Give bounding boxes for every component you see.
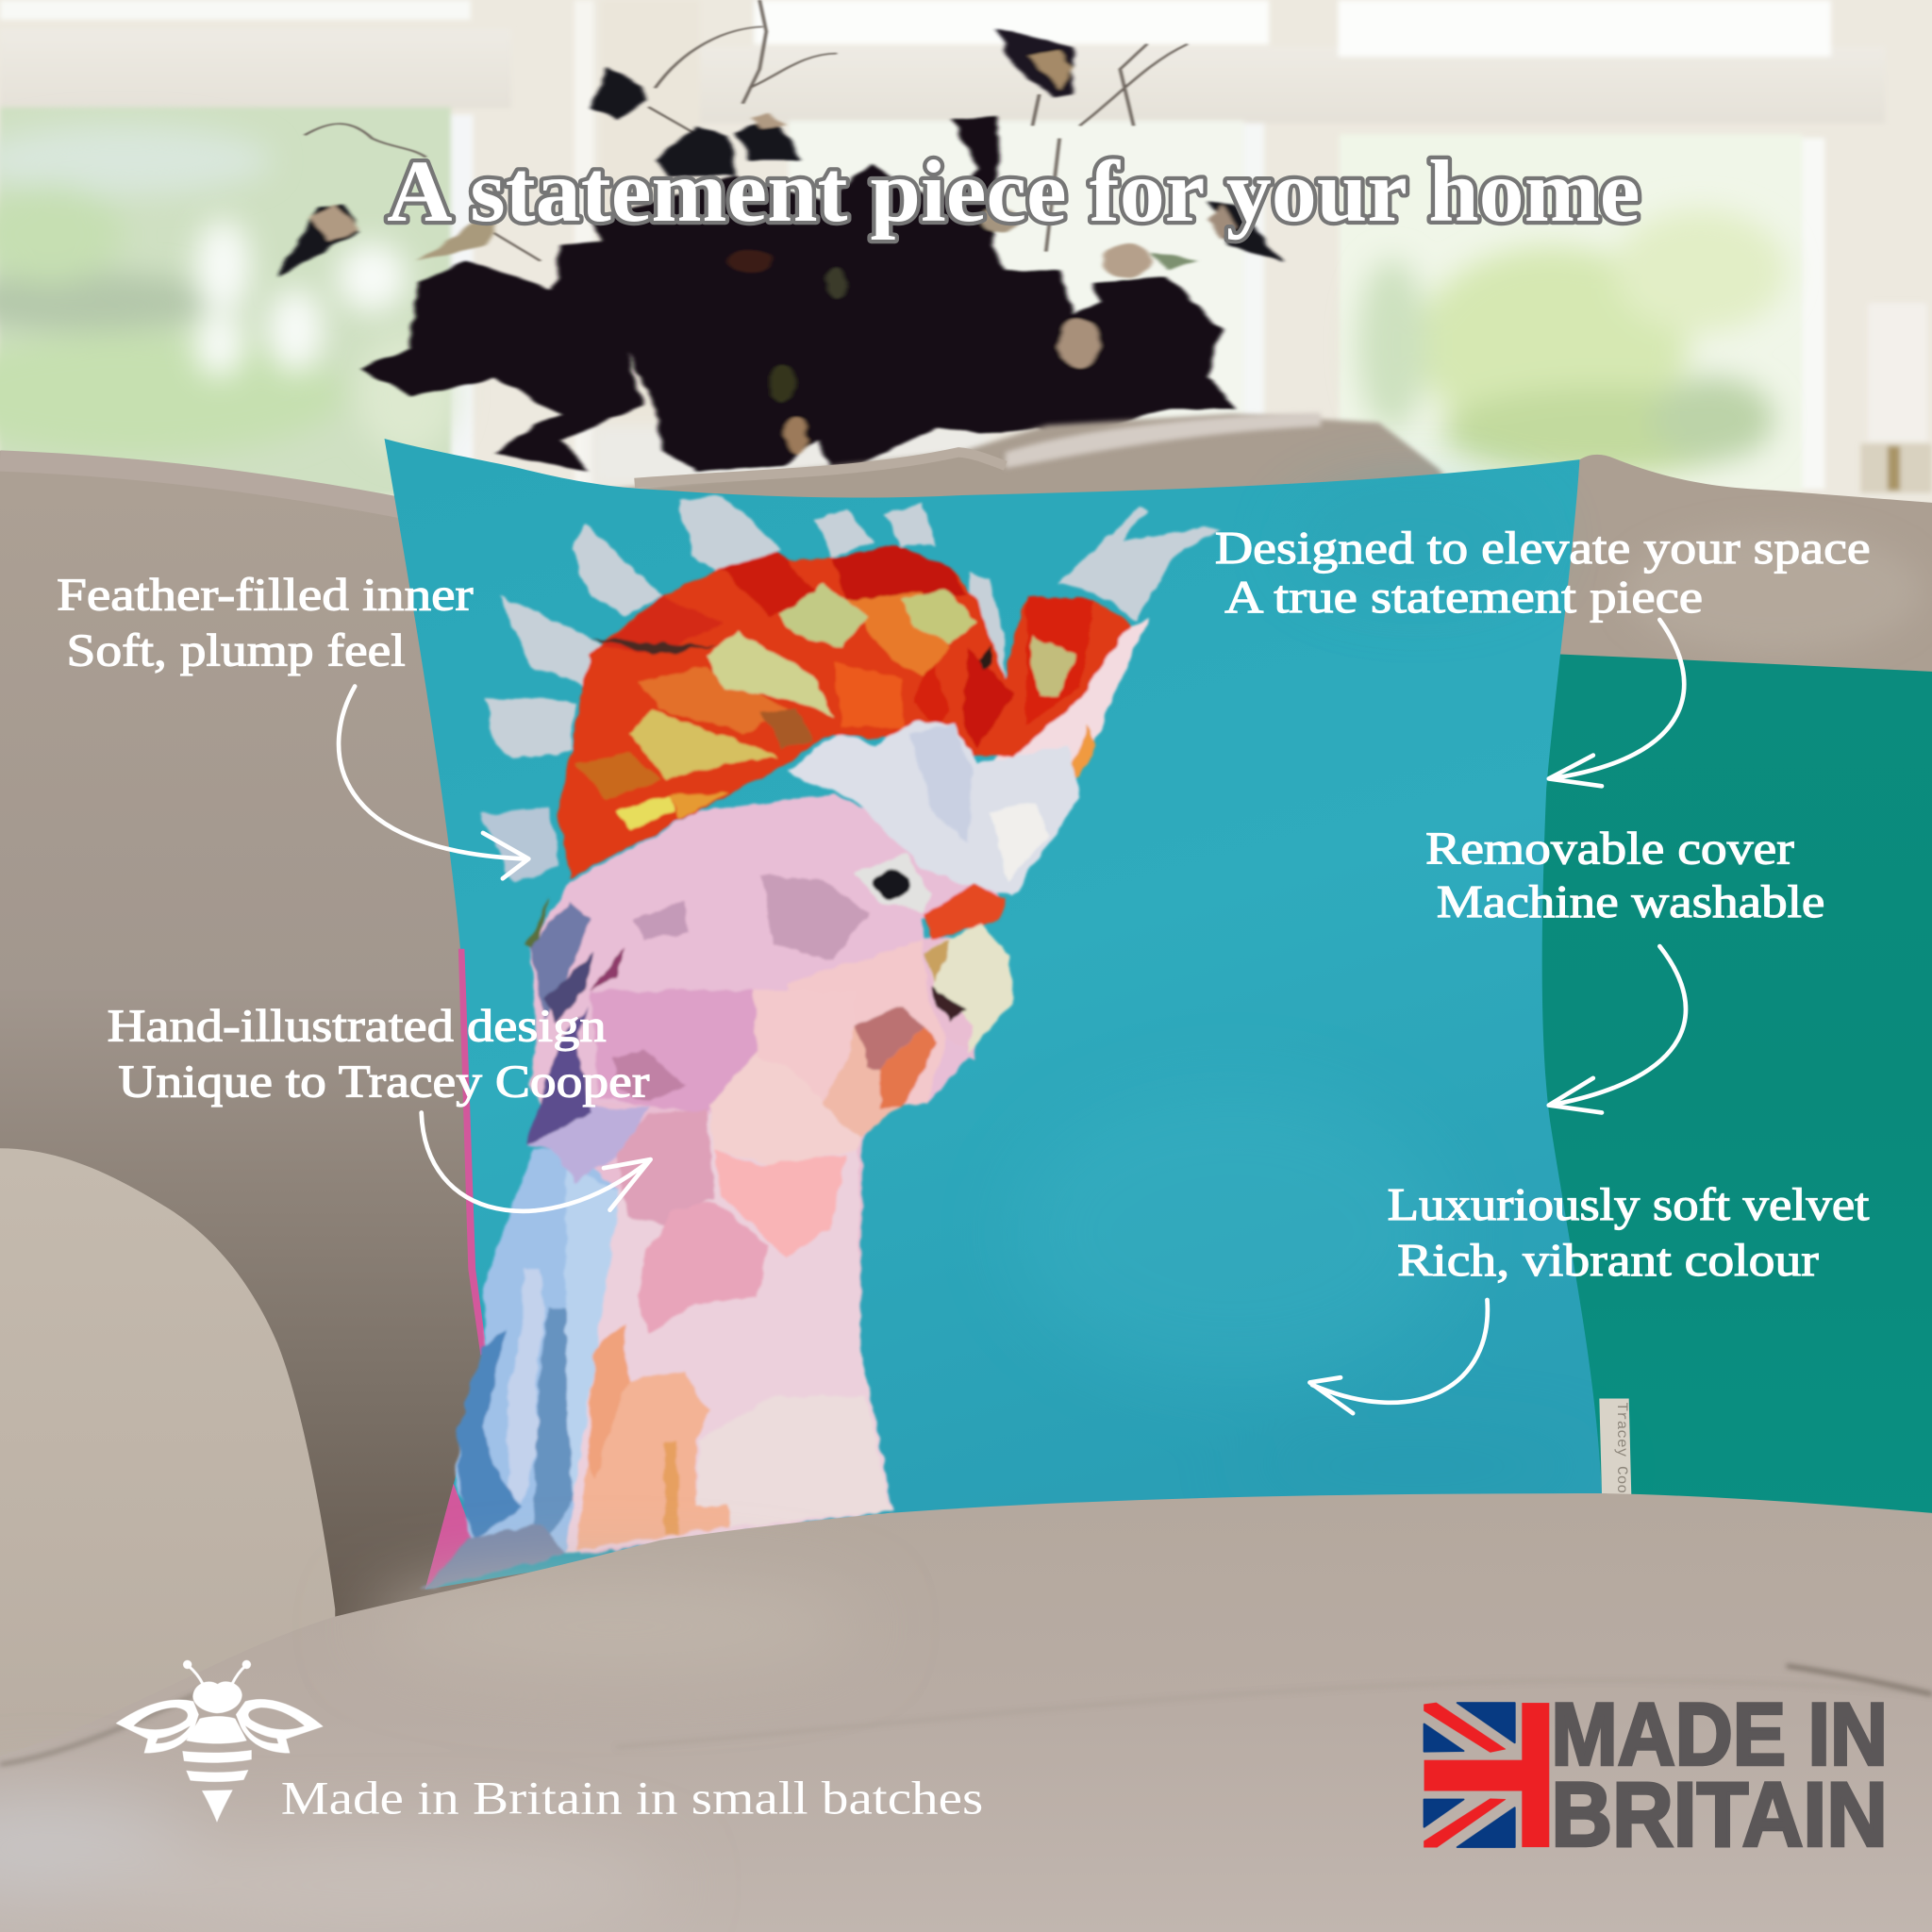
callout: hand-illustrated design: Unique to Tracey Cooper xyxy=(118,1057,649,1107)
round arm cushion xyxy=(0,1148,335,1774)
crown white feathers xyxy=(788,721,1081,897)
beak xyxy=(925,923,1013,1054)
callout: designed to elevate: Designed to elevate your space xyxy=(1215,524,1871,574)
black flower arrangement xyxy=(277,0,1282,472)
center piping xyxy=(635,452,1006,483)
candle xyxy=(1860,303,1932,492)
label tag on cushion: Tracey Coo xyxy=(1613,1402,1630,1493)
eye xyxy=(874,869,910,898)
dark back feathers xyxy=(526,1007,591,1145)
sofa back xyxy=(0,413,1932,1626)
callout: luxuriously soft velvet: Luxuriously soft velvet xyxy=(1388,1180,1870,1230)
salmon chest xyxy=(714,1150,847,1257)
main teal cushion xyxy=(385,439,1602,1590)
pale upper chest xyxy=(710,1010,862,1165)
cheek xyxy=(823,1007,938,1138)
cockatoo lower body xyxy=(422,991,938,1591)
branches xyxy=(305,0,1188,261)
arrow: removable cover xyxy=(1549,946,1686,1112)
callout: luxuriously soft velvet xyxy=(1388,1180,1870,1286)
lilac xyxy=(526,1106,649,1181)
caption: made in Britain in small batches: Made in Britain in small batches xyxy=(281,1773,983,1824)
icon: bee xyxy=(116,1660,324,1823)
petals xyxy=(277,28,1282,472)
cushion fold highlights xyxy=(1010,492,1602,1496)
teal back pillow xyxy=(1478,653,1932,1523)
head pink xyxy=(530,795,1000,1104)
icon: union flag xyxy=(1424,1703,1549,1847)
wing blue xyxy=(422,1150,620,1591)
left back panel xyxy=(0,451,641,1626)
center cushion highlight xyxy=(1006,413,1321,468)
callout: feather-filled inner: Soft, plump feel xyxy=(67,625,406,675)
callout: removable cover: Removable cover xyxy=(1425,824,1794,874)
title: A statement piece for your home xyxy=(387,143,1640,241)
logo wordmark xyxy=(1551,1684,1888,1866)
peach patch xyxy=(576,1324,728,1551)
callout: hand-illustrated design xyxy=(108,1002,649,1107)
seat piping seam xyxy=(0,1666,1932,1764)
callout: removable cover: Machine washable xyxy=(1437,877,1824,927)
callout: designed to elevate: A true statement piece xyxy=(1224,573,1703,623)
front seat cushion xyxy=(0,1493,1932,1932)
upper pink xyxy=(591,991,758,1114)
cockatoo head and crest xyxy=(481,496,1221,1104)
logo: made in Britain xyxy=(1424,1684,1888,1866)
mouth xyxy=(932,987,968,1022)
arrow: feather-filled inner xyxy=(339,687,528,878)
window background xyxy=(0,0,1932,518)
callout: hand-illustrated design: Hand-illustrated design xyxy=(108,1002,607,1052)
right back cushion xyxy=(1503,455,1932,1232)
logo wordmark: BRITAIN xyxy=(1551,1765,1888,1866)
vase xyxy=(591,425,998,487)
callout: designed to elevate xyxy=(1215,524,1871,623)
pale bottom xyxy=(696,1396,891,1526)
eye patch xyxy=(856,854,932,913)
label tag on cushion xyxy=(1599,1398,1631,1496)
cockatoo face xyxy=(874,869,1013,1054)
pink cushion edge xyxy=(425,949,487,1590)
callout: luxuriously soft velvet: Rich, vibrant colour xyxy=(1397,1236,1819,1286)
crest pale side xyxy=(968,620,1148,897)
crest white feather tips xyxy=(481,496,1221,883)
center back cushion xyxy=(616,414,1491,530)
callout: removable cover xyxy=(1425,824,1824,927)
logo wordmark: MADE IN xyxy=(1551,1684,1888,1783)
arrow: luxuriously soft velvet xyxy=(1309,1300,1488,1413)
left piping xyxy=(0,460,400,508)
cockatoo neck base xyxy=(530,937,986,1555)
mid pink xyxy=(616,1109,714,1224)
arrow: hand-illustrated design xyxy=(422,1112,651,1211)
callout: feather-filled inner: Feather-filled inner xyxy=(57,571,474,621)
crest olive and yellow feathers xyxy=(707,631,833,717)
crest red mass xyxy=(558,545,1130,877)
breast pale xyxy=(566,1109,892,1555)
seat shading xyxy=(0,1583,862,1929)
callout: feather-filled inner xyxy=(57,571,474,675)
arrow: designed to elevate xyxy=(1549,620,1684,786)
cere xyxy=(925,886,1007,941)
illustration: cockatoo xyxy=(422,496,1221,1591)
